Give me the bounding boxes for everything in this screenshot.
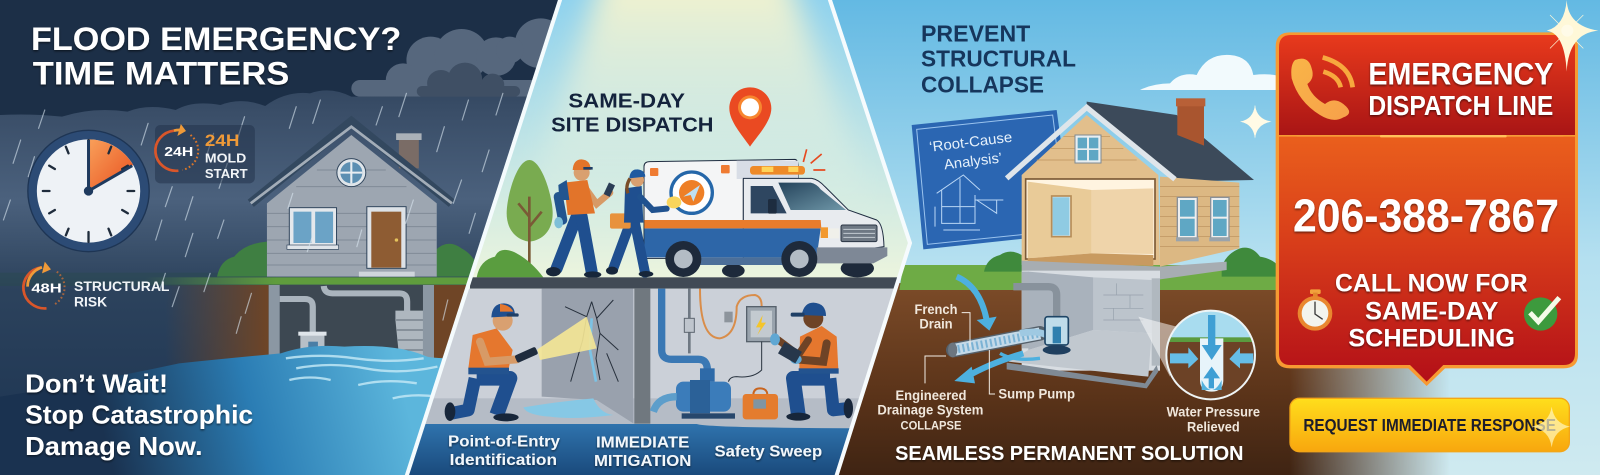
call to action text xyxy=(25,369,253,461)
worker with phone xyxy=(546,159,615,278)
diagram labels: Water Pressure xyxy=(1167,405,1260,420)
roof edge xyxy=(1007,107,1175,179)
light rays xyxy=(545,0,852,178)
card title xyxy=(1368,56,1553,121)
call to action text: Stop Catastrophic xyxy=(25,400,253,429)
siren flash lines xyxy=(803,149,825,170)
bushes xyxy=(984,252,1022,272)
soft sparkle by roof xyxy=(1241,105,1270,138)
roof xyxy=(1087,102,1254,182)
sump pump xyxy=(1013,287,1071,355)
french drain pipe xyxy=(948,332,1047,357)
button: request immediate response: REQUEST IMMEDIATE RESPONSE xyxy=(1303,415,1556,435)
floor slab xyxy=(1022,261,1227,279)
chimney xyxy=(1176,98,1205,146)
storm clouds xyxy=(0,18,552,116)
step labels xyxy=(448,434,822,470)
callout: 24H mold start: 24H xyxy=(205,131,239,150)
diagram labels: Sump Pump xyxy=(998,386,1075,401)
step labels: Identification xyxy=(450,452,557,469)
basement wall xyxy=(400,289,900,429)
rain xyxy=(3,93,520,333)
callout: 48H structural risk: RISK xyxy=(74,295,108,311)
attic window xyxy=(1075,135,1101,163)
blueprint label: Analysis’ xyxy=(943,150,1003,173)
callout: 48H structural risk: STRUCTURAL xyxy=(74,279,170,295)
bushes xyxy=(217,242,480,277)
basement xyxy=(1007,271,1160,388)
step labels: IMMEDIATE xyxy=(596,435,689,452)
heading: flood emergency: TIME MATTERS xyxy=(33,56,289,92)
bottom caption band xyxy=(409,424,850,475)
kneeling worker with tablet xyxy=(770,303,853,421)
leader lines xyxy=(925,313,995,394)
diagram labels: French xyxy=(914,302,957,317)
panel: same-day site dispatch xyxy=(400,0,920,475)
phone number: 206-388-7867 xyxy=(1293,190,1559,242)
button: request immediate response xyxy=(1290,398,1570,452)
sparkle xyxy=(1240,105,1272,138)
diagram labels: Engineered xyxy=(895,388,966,403)
diagonal divider xyxy=(406,0,561,475)
callout: 48H structural risk xyxy=(23,262,170,311)
callout: 24H mold start: MOLD xyxy=(205,151,246,165)
grass line xyxy=(158,277,468,285)
ground and soil xyxy=(838,283,1444,475)
cracked wall section xyxy=(523,289,650,424)
scheduling text: SAME-DAY xyxy=(1365,297,1498,325)
flood water xyxy=(18,346,442,475)
front window xyxy=(287,208,339,249)
heading: same-day site dispatch: SITE DISPATCH xyxy=(551,114,713,137)
pump and pipes xyxy=(653,289,735,419)
heading: prevent structural collapse: COLLAPSE xyxy=(921,71,1044,97)
blueprint xyxy=(912,110,1073,249)
card title: DISPATCH LINE xyxy=(1368,90,1553,121)
worker with flashlight xyxy=(606,169,681,277)
callout: 48H structural risk: 48H xyxy=(31,281,62,296)
call to action text: Don’t Wait! xyxy=(25,369,168,399)
roof xyxy=(251,122,452,203)
panel: flood emergency xyxy=(0,0,596,475)
step labels: Safety Sweep xyxy=(714,444,822,461)
soil cross-section xyxy=(176,285,466,364)
door xyxy=(359,207,415,277)
card title: EMERGENCY xyxy=(1368,56,1553,91)
kneeling worker inspecting xyxy=(445,303,538,421)
icon: map pin xyxy=(729,87,771,147)
electrical panel and wire xyxy=(700,289,776,382)
magnifier callout xyxy=(1138,310,1263,399)
house body xyxy=(267,135,437,277)
flashlight beam xyxy=(537,317,597,360)
callout: 24H mold start: START xyxy=(205,166,248,181)
scheduling text: CALL NOW FOR xyxy=(1335,270,1528,298)
front gable xyxy=(1022,115,1160,265)
basement xyxy=(269,285,434,362)
round window xyxy=(337,159,366,187)
heading: flood emergency xyxy=(32,27,400,87)
van xyxy=(644,159,887,277)
panel: emergency dispatch line xyxy=(1241,0,1598,452)
step labels: Point-of-Entry xyxy=(448,434,561,451)
blue water arrows xyxy=(954,277,1040,383)
heading: prevent structural collapse xyxy=(921,21,1076,97)
chevron divider xyxy=(825,0,910,475)
tree xyxy=(506,160,553,264)
diagram labels: Drainage System xyxy=(877,402,983,417)
icon: green check xyxy=(1524,297,1559,331)
icon: phone xyxy=(1291,57,1353,120)
heading: flood emergency: FLOOD EMERGENCY? xyxy=(31,21,401,58)
floor xyxy=(426,398,859,428)
cloud xyxy=(1140,55,1293,90)
panel: prevent structural collapse xyxy=(820,21,1520,475)
diagram labels xyxy=(877,302,1260,435)
blueprint label: ‘Root-Cause xyxy=(928,130,1013,156)
step labels: MITIGATION xyxy=(594,453,691,470)
cutaway room xyxy=(1026,179,1155,266)
bush xyxy=(477,250,543,277)
sparkle: card corner xyxy=(1547,0,1598,72)
scheduling text xyxy=(1335,270,1528,353)
toolbox xyxy=(743,388,778,419)
callout: 24H mold start: 24H xyxy=(164,144,193,159)
solution caption: SEAMLESS PERMANENT SOLUTION xyxy=(895,442,1243,465)
diagram labels: COLLAPSE xyxy=(900,418,961,432)
scheduling text: SCHEDULING xyxy=(1348,325,1515,353)
heading: prevent structural collapse: PREVENT xyxy=(921,21,1030,47)
call to action text: Damage Now. xyxy=(25,431,203,461)
clock xyxy=(28,130,149,252)
blueprint label xyxy=(928,130,1015,175)
heading: prevent structural collapse: STRUCTURAL xyxy=(921,46,1076,72)
heading: same-day site dispatch xyxy=(552,94,712,132)
side wall with windows xyxy=(1160,177,1239,267)
diagram labels: Drain xyxy=(919,316,953,331)
left ground xyxy=(0,273,218,276)
callout card xyxy=(1276,32,1578,386)
road xyxy=(470,277,900,289)
callout: 24H mold start xyxy=(155,124,255,183)
icon: stopwatch xyxy=(1298,289,1332,331)
heading: same-day site dispatch: SAME-DAY xyxy=(568,89,685,112)
diagram labels: Relieved xyxy=(1187,420,1240,435)
chimney xyxy=(396,133,422,168)
grass strip xyxy=(899,265,1293,290)
